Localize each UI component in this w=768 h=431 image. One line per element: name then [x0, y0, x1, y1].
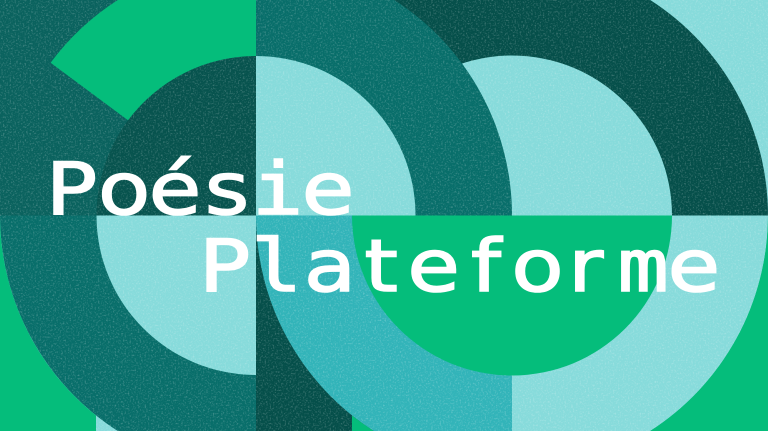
panel: bottom right ring: [512, 216, 768, 431]
panel: bottom middle ring: [256, 216, 512, 431]
green lower left corner: [0, 216, 96, 431]
title: Plateforme: Plateforme: [199, 224, 720, 308]
green lower right corner: [650, 216, 768, 431]
panel: top left quadrant: [0, 0, 256, 216]
panel: bottom left rings: [0, 216, 256, 431]
green half circle: [352, 216, 672, 376]
title: Poésie: Poésie: [46, 147, 354, 231]
green ring sector: [51, 0, 256, 120]
green lower middle corner: [352, 416, 374, 431]
panel: top right rings: [256, 0, 768, 216]
